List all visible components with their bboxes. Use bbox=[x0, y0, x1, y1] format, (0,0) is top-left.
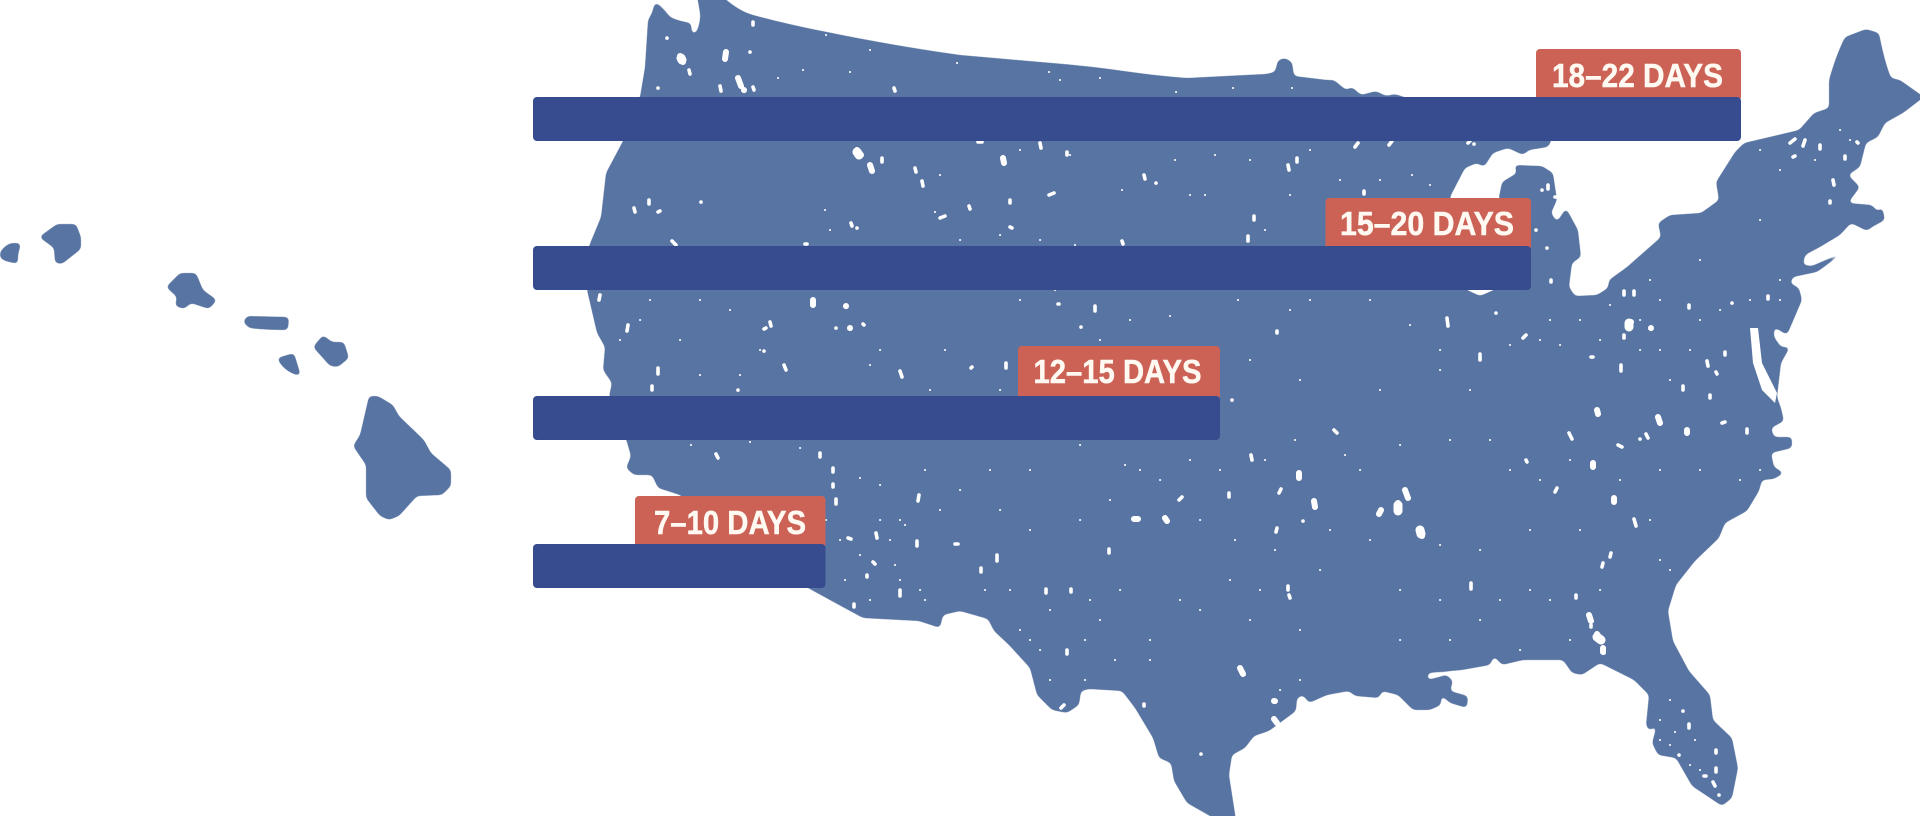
water: Chesapeake Bay bbox=[1750, 328, 1777, 403]
label: 18–22 days bbox=[1536, 49, 1741, 101]
label: 12–15 days bbox=[1018, 346, 1220, 400]
label: 7–10 days bbox=[635, 496, 826, 548]
label: 18–22 days: 18–22 DAYS bbox=[1552, 57, 1723, 94]
map: Hawaiian islands bbox=[0, 224, 451, 520]
label: 15–20 days bbox=[1326, 198, 1531, 250]
label: 15–20 days: 15–20 DAYS bbox=[1340, 205, 1514, 242]
island: Niihau bbox=[0, 243, 21, 264]
map: contiguous United States bbox=[587, 0, 1920, 816]
island: Oahu bbox=[166, 273, 217, 309]
bar: 18–22 days bbox=[533, 49, 1741, 141]
label: 12–15 days: 12–15 DAYS bbox=[1034, 353, 1202, 390]
bar: 7–10 days bbox=[533, 496, 826, 588]
inland lakes and specks, large bbox=[680, 52, 1687, 723]
island: Maui bbox=[313, 335, 349, 367]
bar: 12–15 days bbox=[533, 346, 1220, 440]
label: 7–10 days: 7–10 DAYS bbox=[654, 504, 806, 541]
island: Big Island bbox=[353, 396, 451, 520]
inland lakes and specks, small bbox=[620, 35, 1850, 770]
island: Molokai bbox=[243, 316, 289, 330]
inland lakes and specks, extra large bbox=[681, 58, 1629, 640]
island: Lanai bbox=[277, 353, 301, 376]
inland lakes and specks, medium bbox=[599, 22, 1858, 795]
island: Kauai bbox=[39, 224, 81, 264]
bar: 15–20 days bbox=[533, 198, 1531, 290]
